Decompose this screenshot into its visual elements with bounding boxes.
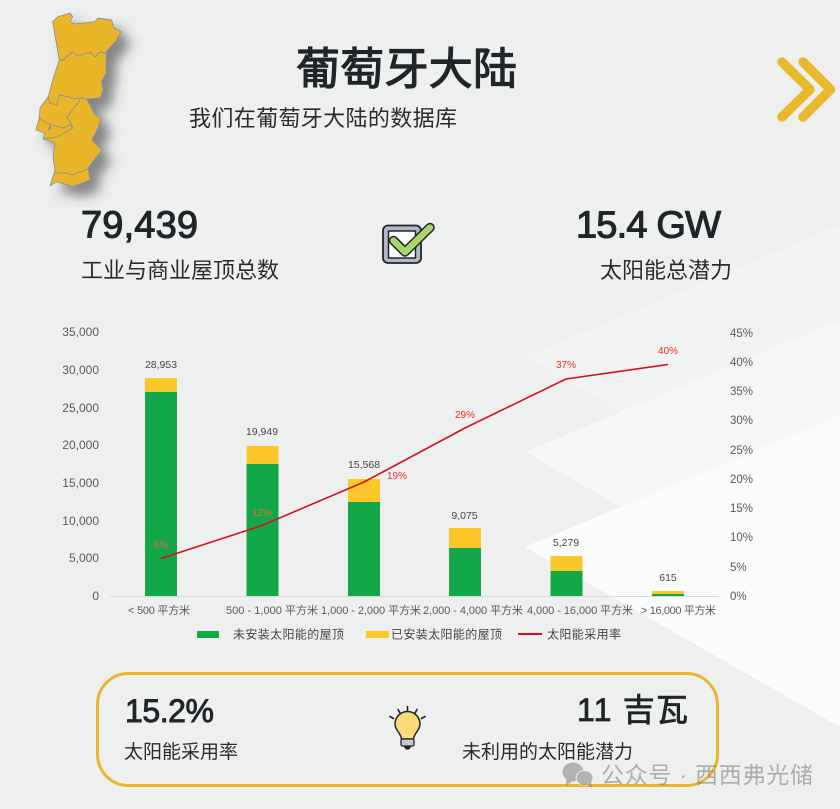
- icon: double chevron arrow: [782, 62, 830, 117]
- legend: 已安装太阳能的屋顶: [391, 626, 502, 642]
- line value labels: 37%: [556, 360, 576, 371]
- right axis labels: 40%: [730, 357, 753, 369]
- category labels: 500 - 1,000 平方米: [226, 603, 318, 617]
- right axis labels: 0%: [730, 591, 747, 603]
- line value labels: 40%: [658, 346, 678, 357]
- stat: total solar potential: 15.4 GW: [576, 204, 721, 246]
- bar value labels: 28,953: [145, 359, 177, 371]
- left axis labels: 25,000: [62, 401, 99, 415]
- panel: summary callout: [98, 674, 718, 786]
- stat: total rooftops: 工业与商业屋顶总数: [81, 258, 279, 283]
- stat: total rooftops: [81, 204, 279, 283]
- adoption rate line: [161, 364, 668, 558]
- left axis labels: 10,000: [62, 514, 99, 528]
- bar value labels: 5,279: [553, 537, 579, 549]
- right axis labels: 10%: [730, 532, 753, 544]
- right axis labels: 45%: [730, 328, 753, 340]
- left axis labels: 30,000: [62, 363, 99, 377]
- right axis labels: 20%: [730, 474, 753, 486]
- category labels: 1,000 - 2,000 平方米: [321, 603, 421, 617]
- stat: total solar potential: 太阳能总潜力: [600, 258, 732, 283]
- right axis labels: 25%: [730, 445, 753, 457]
- left axis labels: 20,000: [62, 438, 99, 452]
- line value labels: 6%: [154, 540, 168, 551]
- right axis labels: [730, 328, 753, 603]
- line value labels: 29%: [455, 410, 475, 421]
- stat: total solar potential: [576, 204, 732, 283]
- right axis labels: 5%: [730, 562, 747, 574]
- legend: 未安装太阳能的屋顶: [233, 626, 344, 642]
- line value labels: 12%: [252, 508, 272, 519]
- stat: unused solar potential: 未利用的太阳能潜力: [462, 741, 633, 763]
- stat: adoption rate: 15.2%: [125, 693, 214, 729]
- subtitle: 我们在葡萄牙大陆的数据库: [189, 106, 457, 131]
- title: 葡萄牙大陆: [296, 45, 517, 94]
- category labels: > 16,000 平方米: [641, 603, 716, 617]
- stat: adoption rate: 太阳能采用率: [124, 741, 238, 763]
- bar value labels: [145, 359, 677, 584]
- line value labels: 19%: [387, 471, 407, 482]
- bar value labels: 9,075: [451, 510, 478, 522]
- icon: map of mainland Portugal: [36, 13, 121, 187]
- icon: light bulb: [390, 706, 425, 749]
- left axis labels: 15,000: [62, 476, 99, 490]
- bar value labels: 15,568: [348, 459, 380, 471]
- watermark: 公众号 · 西西弗光储: [601, 762, 813, 788]
- bar value labels: 19,949: [246, 426, 278, 438]
- legend: [197, 626, 621, 642]
- icon: checkbox with green check: [383, 226, 430, 263]
- stat: unused solar potential: [462, 692, 688, 763]
- left axis labels: 35,000: [62, 325, 99, 339]
- category labels: [128, 603, 716, 617]
- stat: adoption rate: [124, 693, 238, 763]
- chart: rooftops by size with solar adoption rate: [62, 325, 753, 642]
- stacked bars: [145, 378, 684, 596]
- left axis labels: 0: [92, 589, 99, 603]
- left axis labels: [62, 325, 99, 603]
- legend: 太阳能采用率: [547, 626, 621, 642]
- category labels: < 500 平方米: [128, 603, 190, 617]
- category labels: 4,000 - 16,000 平方米: [527, 603, 633, 617]
- left axis labels: 5,000: [69, 551, 99, 565]
- category labels: 2,000 - 4,000 平方米: [423, 603, 523, 617]
- stat: total rooftops: 79,439: [81, 204, 198, 246]
- right axis labels: 30%: [730, 415, 753, 427]
- stat: unused solar potential: 11 吉瓦: [577, 692, 688, 728]
- right axis labels: 15%: [730, 503, 753, 515]
- right axis labels: 35%: [730, 386, 753, 398]
- bar value labels: 615: [659, 572, 677, 584]
- line value labels: [154, 346, 678, 551]
